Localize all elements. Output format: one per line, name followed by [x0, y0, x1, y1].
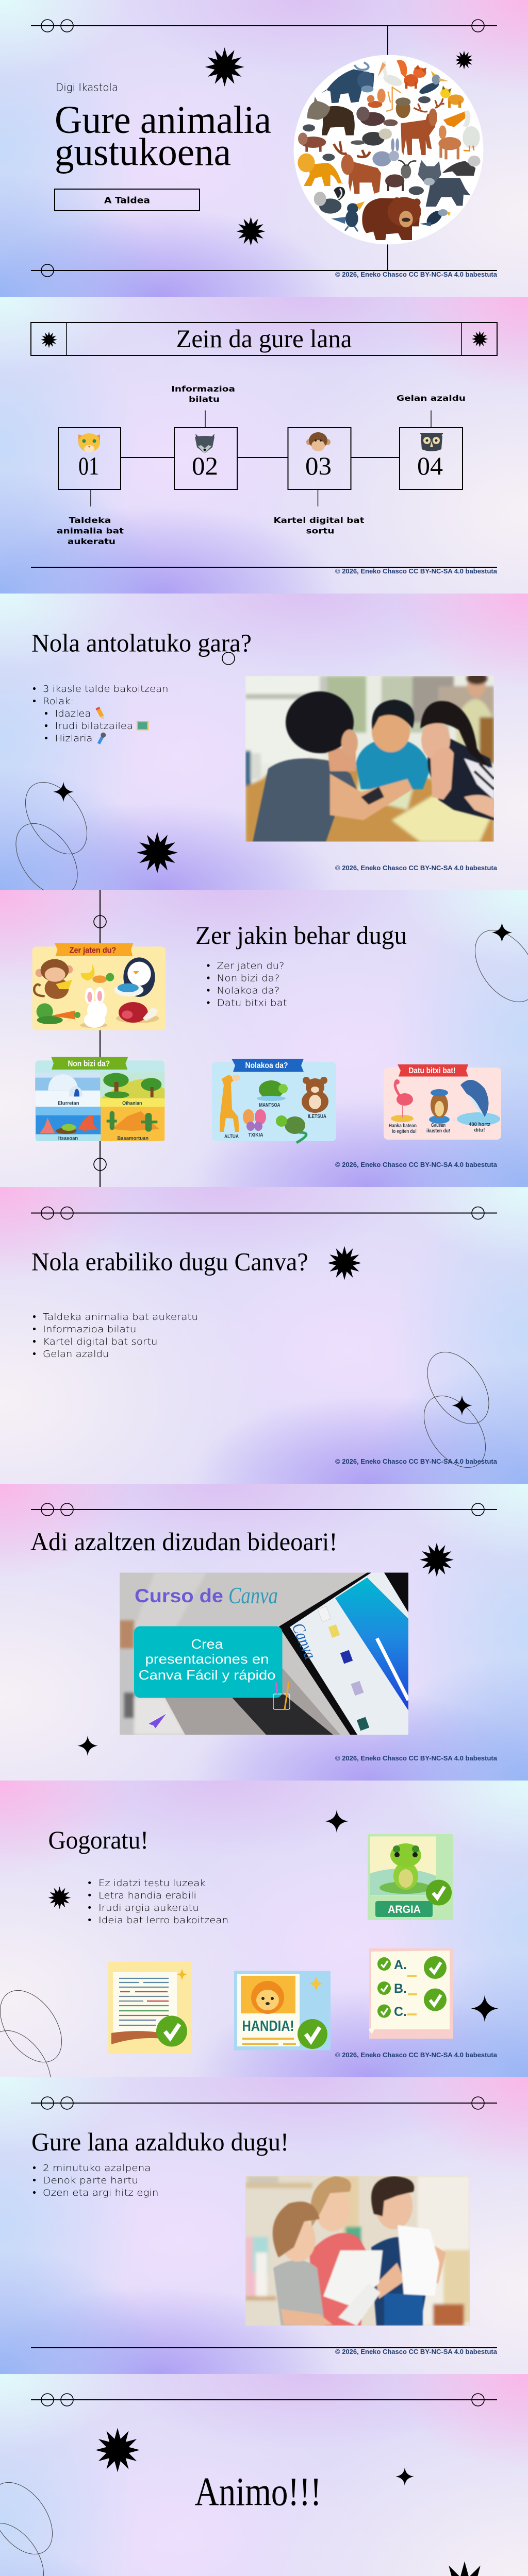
card: what is it like: ILETSUA: [308, 1113, 326, 1120]
panel: slide 2 what is our work: [0, 297, 528, 594]
bullet list: Zer jaten du?: [217, 960, 285, 972]
penguin: [114, 957, 155, 997]
turtle: [257, 1080, 288, 1101]
title: Zein da gure lana: [176, 324, 352, 353]
wolf: [418, 160, 470, 207]
moose: [334, 141, 381, 194]
cougar: [298, 154, 344, 186]
bullet list: Nolakoa da?: [217, 985, 279, 996]
image: quiz choices: C.: [394, 2005, 407, 2019]
monkey: [34, 959, 73, 999]
skunk: [314, 187, 345, 214]
flamingo: [391, 1079, 414, 1122]
title: Gogoratu!: [48, 1825, 148, 1854]
dark bird: [331, 201, 365, 231]
label: step 1: Taldeka: [69, 516, 111, 525]
title: Adi azaltzen dizudan bideoari!: [30, 1527, 337, 1556]
icon: star: [420, 1543, 454, 1577]
bullet list: Kartel digital bat sortu: [43, 1336, 158, 1347]
meat: [116, 1002, 159, 1023]
label: step 1: aukeratu: [68, 537, 116, 546]
buffalo: [321, 62, 374, 103]
label: step 4: Gelan azaldu: [397, 394, 466, 403]
squirrel: [367, 89, 386, 108]
step 02 box: [174, 428, 237, 489]
bullet list: [33, 684, 169, 745]
card: fun fact: ditu!: [474, 1127, 485, 1133]
step 01 box: [58, 428, 121, 489]
icon: sparkle: [53, 782, 74, 802]
bullet list: 2 minutuko azalpena: [43, 2163, 151, 2174]
bear: [302, 1077, 328, 1113]
bullet list: Irudi argia aukeratu: [98, 1903, 199, 1913]
fox: [397, 60, 426, 89]
icon: cat: [78, 433, 100, 452]
card: where does it live: [35, 1057, 164, 1141]
bullet list: Idazlea: [55, 708, 91, 719]
footer credit: © 2026, Eneko Chasco CC BY-NC-SA 4.0 babestuta: [335, 865, 498, 872]
step 03 box: [288, 428, 351, 489]
text: Canva on screen: Canva: [288, 1620, 320, 1662]
step 04 box: 04: [417, 451, 443, 480]
icon: wolf: [195, 434, 214, 453]
footer credit: © 2026, Eneko Chasco CC BY-NC-SA 4.0 babestuta: [335, 2052, 498, 2059]
pelican: [443, 111, 480, 151]
footer credit: © 2026, Eneko Chasco CC BY-NC-SA 4.0 babestuta: [335, 1161, 498, 1168]
image: quiz choices: B.: [394, 1981, 407, 1996]
image: text book: [108, 1962, 192, 2054]
teal caption box: Canva Fácil y rápido: [138, 1667, 275, 1683]
teal caption box: [134, 1626, 283, 1698]
panel: slide 6 video: [0, 1484, 528, 1781]
image: circle of animals: [294, 55, 484, 244]
card: what is it like: Nolakoa da?: [245, 1061, 288, 1070]
card: where does it live: Oihanian: [122, 1100, 142, 1106]
icon: star: [48, 1887, 71, 1909]
decorative ovals: [3, 771, 100, 906]
image: frog clear: ARGIA: [388, 1904, 421, 1916]
label: step 3: Kartel digital bat: [273, 516, 364, 525]
panel: slide 4 what we need to know: [0, 890, 528, 1187]
card: where does it live: Elurretan: [58, 1100, 79, 1106]
step 04 box: [400, 428, 463, 489]
label: step 1: animalia bat: [57, 527, 124, 536]
owl: [429, 1089, 450, 1124]
icon: sparkle: [492, 922, 513, 943]
photo: children presenting: [245, 2176, 470, 2326]
card: fun fact: Gauean: [431, 1122, 446, 1128]
dolphin: [457, 1080, 500, 1126]
boar: [307, 97, 355, 135]
image: frog clear: [368, 1834, 453, 1920]
bullet list: Letra handia erabili: [98, 1890, 196, 1901]
group label box: [55, 189, 200, 211]
bullet list: Ozen eta argi hitz egin: [43, 2188, 159, 2198]
bullet list: [33, 2163, 159, 2198]
icon: microphone: [96, 732, 107, 745]
panel: slide 3 how we organise: [0, 594, 528, 890]
beaver: [356, 107, 398, 126]
bullet list: Non bizi da?: [217, 973, 279, 984]
icon: pencil: [95, 707, 106, 720]
panel: slide 8 presenting: [0, 2077, 528, 2374]
card: fun fact: ikusten du!: [426, 1128, 450, 1134]
step 02 box: 02: [192, 451, 218, 480]
bear: [362, 197, 421, 240]
vegetables: [37, 1003, 80, 1024]
bullet list: Taldeka animalia bat aukeratu: [43, 1312, 198, 1323]
card: what does it eat: Zer jaten du?: [70, 946, 116, 955]
title: Nola erabiliko dugu Canva?: [31, 1247, 308, 1276]
icon: star upper left: [95, 2428, 140, 2472]
banana and carrot: [81, 963, 114, 983]
bird: [419, 71, 449, 94]
rabbit: [80, 987, 107, 1028]
icon: pencils in mug: [273, 1682, 290, 1709]
card: fun fact: lo egiten du!: [392, 1128, 417, 1134]
hedgehogs: [303, 96, 431, 195]
footer credit: © 2026, Eneko Chasco CC BY-NC-SA 4.0 babestuta: [335, 568, 498, 575]
teal caption box: presentaciones en: [145, 1651, 269, 1667]
step 01 box: 01: [78, 451, 99, 480]
icon: sparkle right: [395, 2467, 414, 2486]
bullet list: Gelan azaldu: [43, 1349, 109, 1360]
title: Gure animalia: [55, 98, 271, 142]
card: what does it eat: [32, 943, 166, 1030]
bullet list: [33, 1312, 198, 1360]
decorative ovals: [0, 2471, 65, 2576]
bullet list: Ideia bat lerro bakoitzean: [98, 1915, 228, 1926]
card: where does it live: Basamortuan: [117, 1136, 148, 1141]
icon: star top right: [455, 50, 473, 69]
owl: [395, 97, 410, 118]
icon: star lower right: [433, 2562, 496, 2576]
title: Nola antolatuko gara?: [31, 629, 252, 657]
icon: star: [327, 1246, 361, 1280]
footer credit: © 2026, Eneko Chasco CC BY-NC-SA 4.0 babestuta: [335, 1458, 498, 1465]
photo: children working together: [245, 676, 494, 842]
icon: star large: [205, 47, 244, 87]
bullet list: Hizlaria: [55, 733, 93, 744]
title: Animo!!!: [195, 2469, 322, 2514]
card: fun fact: Hanka batean: [389, 1123, 417, 1129]
panel: slide 5 how we use Canva: [0, 1187, 528, 1484]
text: course title: Canva: [228, 1582, 278, 1608]
card: what is it like: MANTSOA: [259, 1102, 280, 1108]
title: [55, 98, 271, 174]
text: school name: Digi Ikastola: [56, 81, 118, 94]
icon: owl: [420, 433, 443, 451]
card: where does it live: Itsasoan: [58, 1136, 78, 1141]
rabbit: [372, 138, 399, 166]
bullet list: Irudi bilatzailea: [55, 721, 133, 732]
card: fun fact: 400 hortz: [469, 1121, 490, 1127]
decorative ovals: [0, 1979, 74, 2113]
card: where does it live: Non bizi da?: [68, 1059, 110, 1068]
icon: sparkle: [452, 1395, 472, 1416]
bullet list: [88, 1878, 228, 1926]
bullet list: Datu bitxi bat: [217, 997, 287, 1009]
piglet: [298, 132, 326, 152]
stork: [377, 61, 404, 111]
label: step 2: bilatu: [189, 395, 220, 404]
icon: framed picture: [137, 721, 148, 731]
bullet list: 3 ikasle talde bakoitzean: [43, 684, 168, 694]
image: lion big: [234, 1971, 331, 2050]
title frame: [31, 323, 497, 355]
card: fun fact: Datu bitxi bat!: [408, 1066, 456, 1075]
icon: star: [137, 832, 178, 873]
icon: sparkle: [77, 1735, 98, 1756]
bullet list: Denok parte hartu: [43, 2175, 138, 2186]
icon: sparkle top: [325, 1809, 349, 1833]
text: course title: [135, 1582, 278, 1608]
label: step 2: [171, 384, 235, 404]
teal caption box: Crea: [191, 1636, 223, 1652]
decorative oval: [463, 919, 528, 1013]
text: course title: Curso de: [135, 1585, 223, 1606]
card: what is it like: TXIKIA: [249, 1132, 263, 1138]
raccoon: [351, 128, 392, 146]
image: quiz choices: A.: [394, 1958, 407, 1972]
panel: slide 9 closing: [0, 2374, 528, 2576]
image: quiz choices: [369, 1948, 453, 2039]
card: what is it like: ALTUA: [224, 1133, 239, 1140]
goat: [385, 160, 416, 191]
title: Gure lana azalduko dugu!: [31, 2127, 289, 2156]
panel: slide 1 cover: [0, 0, 528, 297]
deer: [401, 98, 444, 155]
footer credit: © 2026, Eneko Chasco CC BY-NC-SA 4.0 babestuta: [335, 2348, 498, 2355]
bullet list: Informazioa bilatu: [43, 1324, 136, 1335]
icon: monkey: [306, 432, 331, 451]
panel: slide 7 remember: [0, 1781, 528, 2077]
label: step 2: Informazioa: [171, 384, 235, 394]
card: fun fact: [384, 1064, 501, 1140]
step 03 box: 03: [305, 451, 332, 480]
image: lion big: HANDIA!: [242, 2018, 294, 2035]
lizard: [276, 1115, 306, 1143]
badger: [442, 156, 481, 176]
card: what is it like: [212, 1059, 336, 1143]
giraffe: [220, 1075, 240, 1132]
fawn: [438, 125, 461, 159]
bullet list: Ez idatzi testu luzeak: [98, 1878, 205, 1889]
label: step 3: sortu: [306, 527, 334, 536]
label: step 3: [273, 516, 364, 536]
group label box: A Taldea: [104, 196, 150, 206]
decorative ovals: [411, 1341, 502, 1479]
lynx: [440, 86, 464, 108]
butterfly: [243, 1109, 266, 1131]
footer credit: © 2026, Eneko Chasco CC BY-NC-SA 4.0 babestuta: [335, 1755, 498, 1762]
title: Zer jakin behar dugu: [195, 921, 407, 950]
icon: sparkle right: [471, 1995, 498, 2022]
footer credit: © 2026, Eneko Chasco CC BY-NC-SA 4.0 babestuta: [335, 271, 498, 278]
bullet list: [207, 960, 287, 1009]
video thumbnail: Canva course: [120, 1572, 408, 1736]
crow: [420, 208, 451, 227]
title: gustukoena: [55, 131, 231, 174]
icon: star lower: [236, 217, 265, 246]
label: step 1: [57, 516, 124, 546]
bullet list: Rolak:: [43, 696, 74, 707]
icon: paper plane: [148, 1713, 167, 1729]
